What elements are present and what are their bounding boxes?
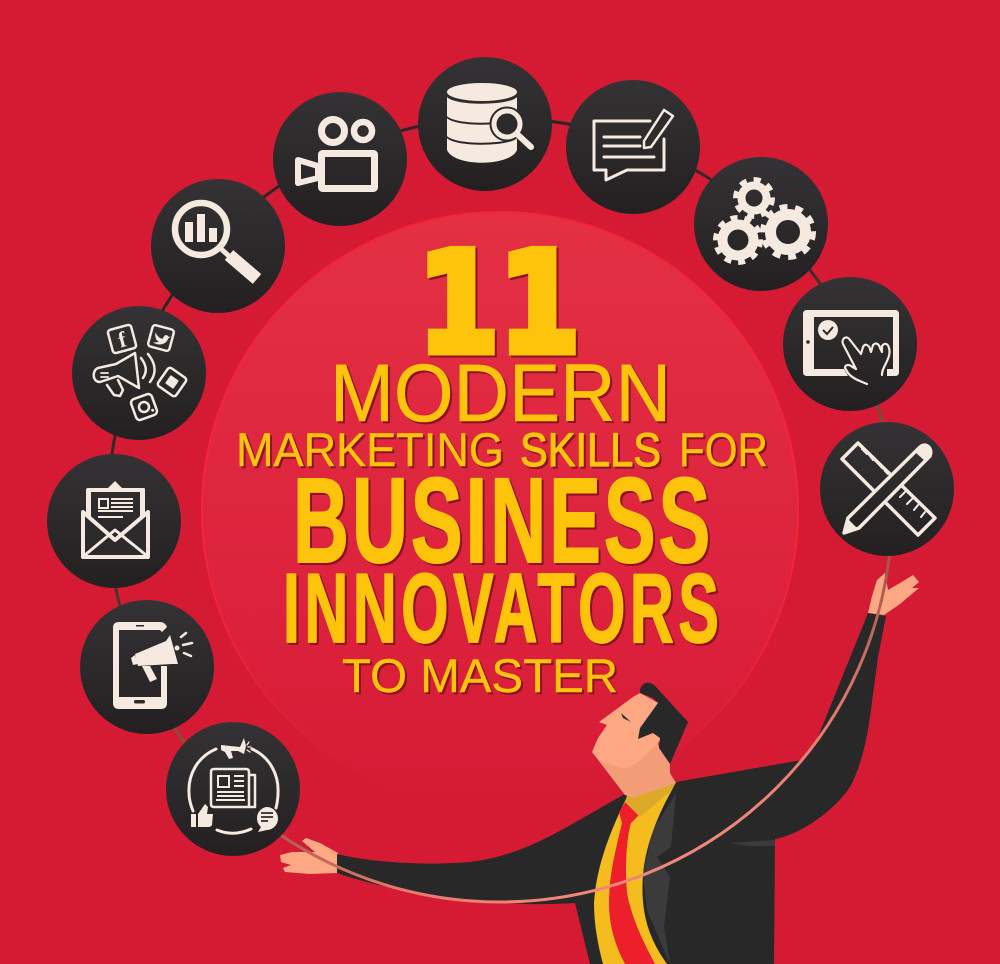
right hand [868,573,919,615]
closed eye [621,713,631,722]
icon disc: analytics search [151,179,285,313]
title line: MARKETING SKILLS FOR: SKILLS [520,423,661,476]
icon: letter [86,481,145,522]
icon disc: email newsletter [47,454,181,588]
icon disc: social media [72,306,206,440]
icon: phone buttons [134,625,145,704]
face [592,693,662,769]
title line: MARKETING SKILLS FOR [236,423,768,476]
icon: check badge [818,320,838,340]
hair [638,683,688,764]
icon: megaphone [221,738,251,759]
icon: pencil [844,445,931,533]
title line: BUSINESS: BUSINESS [293,452,710,588]
tie [609,801,655,964]
icon: ruler [842,443,935,535]
icon disc: database search [418,57,552,191]
icon: envelope fold [85,530,146,555]
icon: pointing hand [843,337,890,384]
icon: speech bubble [594,121,664,180]
icon: bar chart [185,214,217,242]
title [236,223,768,702]
icon disc: video camera [273,92,407,226]
icon disc: gears [694,157,828,291]
icon: tablet [803,310,899,376]
icon: magnifier [175,203,257,279]
icon disc: tools [820,422,954,556]
title number 11: 11 [418,223,580,384]
icon: at tile [130,393,158,421]
jacket underarm shading [730,840,775,846]
icon: magnifier [493,110,531,147]
icon: video tile [157,367,187,397]
icon: smartphone [113,622,167,709]
icon: medium gear [716,218,760,262]
icon: small gear [736,180,772,216]
icon: database cylinder [447,83,517,163]
large central circle [202,212,798,808]
shirt [594,790,672,964]
icon disc: writing [566,80,700,214]
icon: film reels [322,120,372,142]
icon: camera lens [298,160,318,183]
icon: tablet button dot [806,340,810,344]
icon: facebook tile: f [115,326,130,353]
rope connecting icons [108,118,892,902]
jacket lapel shading [643,793,676,964]
businessman illustration [280,573,919,964]
title line: TO MASTER: TO MASTER [342,649,618,702]
title line: INNOVATORS: INNOVATORS [283,554,719,664]
jacket [337,613,886,964]
neck [592,735,676,798]
icon disc: content marketing [166,722,300,856]
icon: megaphone [94,353,155,396]
icon: pencil [644,110,673,148]
icon: envelope [83,512,148,557]
icon disc: mobile marketing [80,600,214,734]
title line: MARKETING SKILLS FOR: MARKETING [236,423,504,476]
icon: circular arrows [189,749,278,833]
icon: twitter tile [148,325,174,351]
icon: newspaper [211,769,255,807]
collar [625,782,676,817]
icon: camera body [322,154,374,188]
icon: comment bubble [257,807,278,832]
title line: MODERN: MODERN [330,348,671,439]
icon: megaphone [131,633,192,682]
left hand [280,838,338,874]
icon: text lines [604,137,654,157]
icon: large gear [763,207,813,257]
icon: thumbs up [191,804,213,827]
icon disc: tablet touch [783,277,917,411]
title line: MARKETING SKILLS FOR: FOR [679,423,768,476]
